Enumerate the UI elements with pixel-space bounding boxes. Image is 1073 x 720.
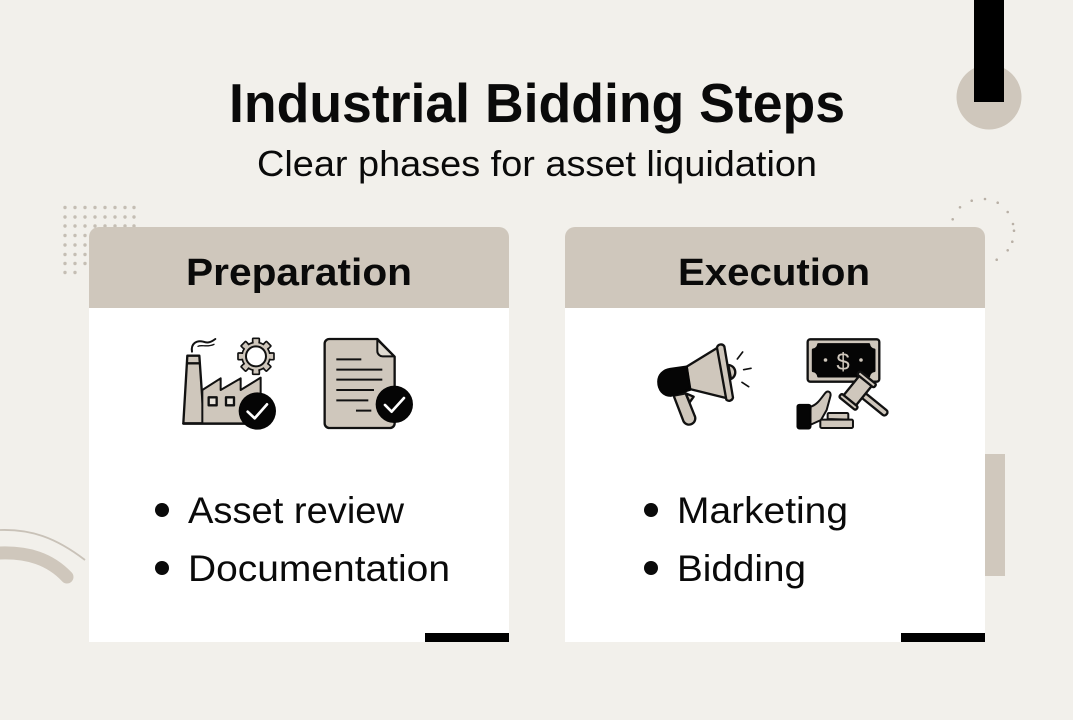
card body <box>565 300 985 642</box>
icon: banknote dots <box>824 358 863 362</box>
icon: factory with gear <box>183 338 274 424</box>
icon: megaphone <box>658 344 751 425</box>
panel: preparation <box>89 227 509 642</box>
panel header <box>565 227 985 308</box>
list: preparation items: Asset review <box>188 490 404 531</box>
icon: banknote and gavel <box>798 339 897 428</box>
list: preparation items: Documentation <box>188 548 450 589</box>
title: Industrial Bidding Steps <box>229 72 845 134</box>
heading: preparation: Preparation <box>186 252 412 294</box>
panel: execution <box>565 227 985 642</box>
panel header <box>89 227 509 308</box>
list: preparation items <box>155 490 450 589</box>
subtitle: Clear phases for asset liquidation <box>257 143 817 184</box>
icon: factory check badge <box>239 392 276 430</box>
card body <box>89 300 509 642</box>
heading: execution: Execution <box>678 252 870 294</box>
list: execution items: Marketing <box>677 490 848 531</box>
decoration: left arcs <box>0 530 85 577</box>
decoration: dotted ring <box>951 198 1015 261</box>
list: execution items: Bidding <box>677 548 806 589</box>
decoration: right tan block <box>985 454 1005 576</box>
icon: document with check <box>325 339 413 428</box>
list: execution items <box>644 490 848 589</box>
decoration: dot grid <box>63 206 136 274</box>
accent bar <box>425 633 509 642</box>
icon: dollar sign on banknote: $ <box>836 349 850 376</box>
decoration: circle and black bar <box>956 0 1022 130</box>
accent bar <box>901 633 985 642</box>
